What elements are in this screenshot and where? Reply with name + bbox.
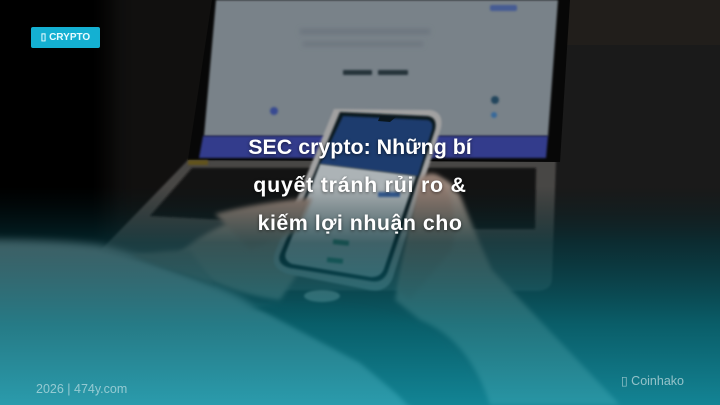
category badge [31, 27, 100, 48]
hands and forearm [130, 178, 620, 405]
title: kiếm lợi nhuận cho [258, 211, 462, 235]
right thumb over phone [398, 174, 454, 300]
laptop [101, 0, 570, 291]
phone [274, 109, 442, 290]
title [248, 135, 473, 236]
title: SEC crypto: Những bí [248, 135, 472, 159]
left thumb over phone [215, 198, 312, 250]
category badge: ▯ CRYPTO [41, 32, 90, 43]
footer: year and site: 2026 | 474y.com [36, 382, 127, 396]
title: quyết tránh rủi ro & [253, 173, 467, 197]
image source credit: ▯ Coinhako [621, 374, 684, 388]
sweater and sleeve [0, 240, 492, 405]
